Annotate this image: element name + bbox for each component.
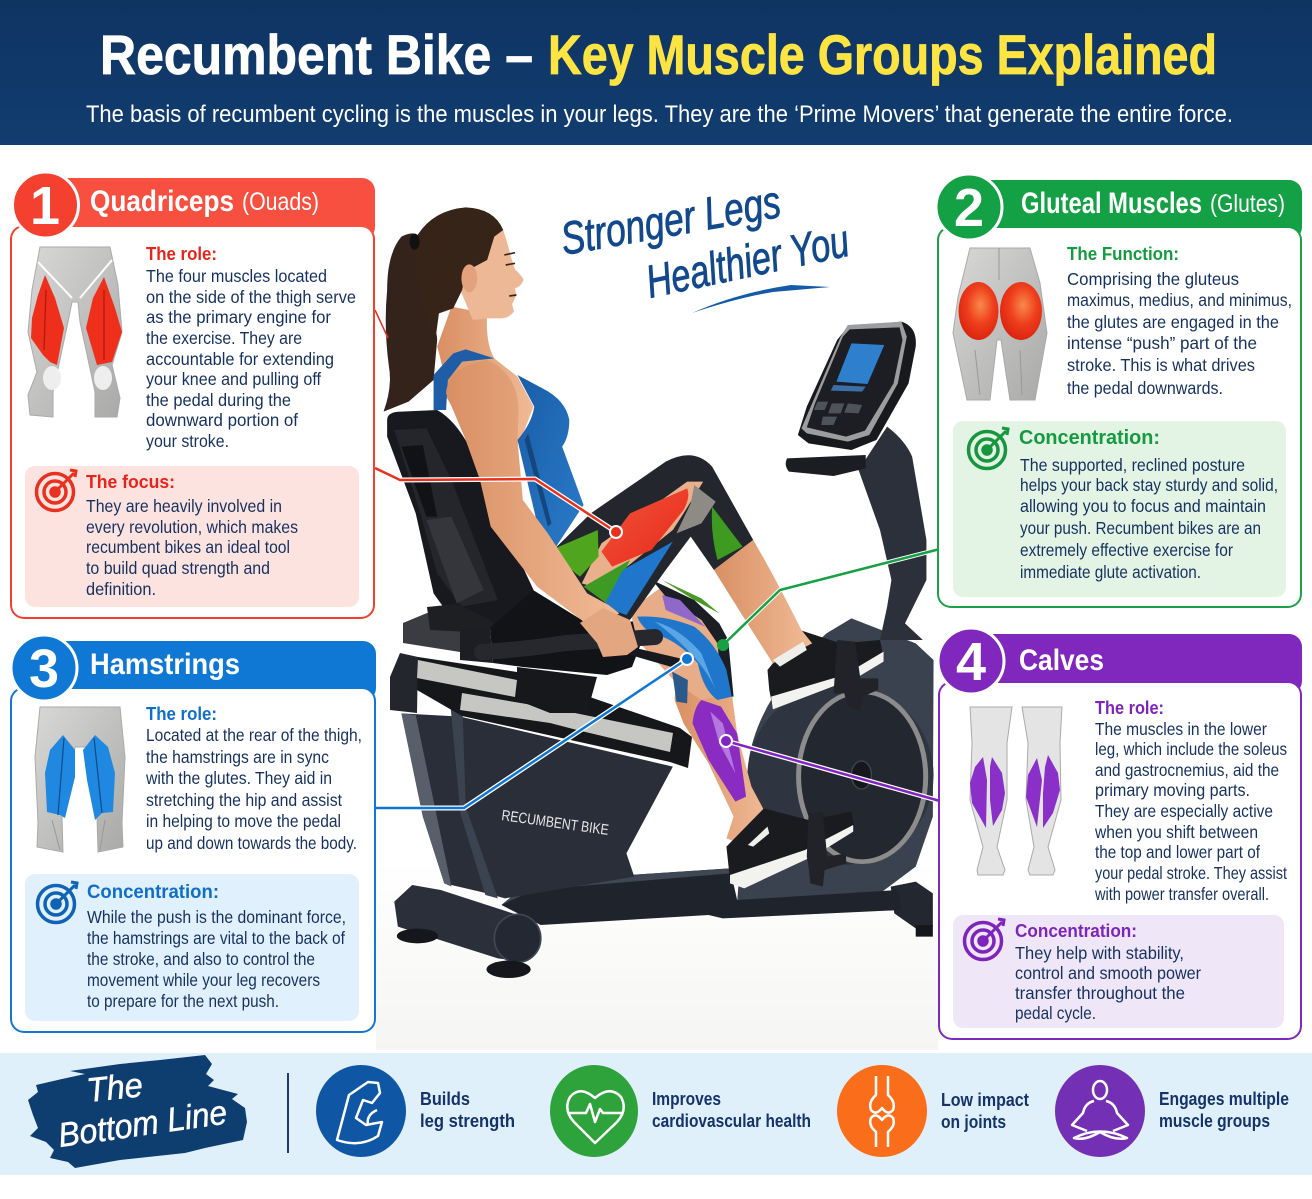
icon: meditating figure <box>1055 1065 1145 1157</box>
eye and lips <box>504 253 516 296</box>
under-thigh bar <box>630 647 680 668</box>
concentration text <box>1015 921 1201 1023</box>
slogan underline <box>692 285 830 313</box>
bike rear flywheel assembly <box>737 618 934 937</box>
icon: heart <box>550 1065 638 1157</box>
connector: calves <box>720 735 940 801</box>
benefit text line two: cardiovascular health <box>652 1111 811 1131</box>
icon: quadriceps anatomy <box>28 247 122 417</box>
handle block <box>460 628 493 663</box>
behind knee block <box>672 672 688 703</box>
bike console post <box>859 427 926 640</box>
panel: calves <box>938 628 1302 1040</box>
number badge 4: 4 <box>956 632 986 692</box>
text: the role: as the primary engine for <box>146 307 331 327</box>
seat back <box>387 410 534 627</box>
calf muscle <box>692 700 746 802</box>
text: the role: your knee and pulling off <box>146 369 321 389</box>
sock <box>748 827 769 847</box>
benefit: muscle groups <box>1055 1065 1289 1157</box>
text: the role <box>145 704 362 853</box>
hair tie <box>410 234 420 250</box>
benefit text line two: on joints <box>941 1112 1006 1132</box>
hair <box>414 207 503 340</box>
text: the role: the hamstrings are in sync <box>146 747 329 767</box>
text: the role: stretching the hip and assist <box>146 790 342 810</box>
panel: hamstrings <box>10 635 376 1033</box>
icon: glutes anatomy <box>953 248 1047 400</box>
ponytail <box>384 233 437 412</box>
text: the role: and gastrocnemius, aid the <box>1095 760 1279 780</box>
icon: calves anatomy <box>970 707 1062 875</box>
focus text: They are heavily involved in <box>86 496 282 516</box>
sock <box>773 642 807 667</box>
text: the role: The muscles in the lower <box>1095 719 1267 739</box>
face <box>453 223 524 320</box>
connector: glutes <box>717 549 940 651</box>
benefit text: Improves <box>652 1089 721 1109</box>
calf skin <box>675 643 769 845</box>
upper pedal strap <box>834 640 878 712</box>
slogan line two: Healthier You <box>641 214 854 308</box>
illustration: seat and rails <box>390 590 692 768</box>
benefit text: Low impact <box>941 1090 1029 1110</box>
benefit: low impact <box>837 1065 1029 1157</box>
text: the role: The role: <box>146 244 217 264</box>
concentration text <box>1019 427 1278 582</box>
icon: target <box>968 428 1008 468</box>
focus text: to build quad strength and <box>86 558 270 578</box>
concentration text: to prepare for the next push. <box>87 991 279 1011</box>
bike main frame <box>394 697 901 978</box>
title: Recumbent Bike – <box>100 23 533 86</box>
brush title <box>28 1055 247 1168</box>
icon: target <box>38 882 77 922</box>
icon: hamstrings anatomy <box>35 707 125 852</box>
number badge 3: 3 <box>29 639 59 699</box>
raised leg <box>555 455 812 667</box>
concentration text <box>87 882 346 1011</box>
glute strip green <box>662 580 719 613</box>
quadriceps muscle <box>601 488 688 567</box>
concentration text: immediate glute activation. <box>1020 562 1201 582</box>
concentration text: Concentration: <box>1015 921 1137 941</box>
number badge 3 <box>11 635 77 701</box>
concentration text: While the push is the dominant force, <box>87 907 346 927</box>
shin <box>714 540 812 663</box>
knee <box>676 485 716 533</box>
text: the role: with power transfer overall. <box>1094 884 1269 904</box>
number badge 2: 2 <box>954 178 984 238</box>
panel heading: Quadriceps <box>90 185 234 218</box>
floor background <box>376 860 938 1050</box>
benefit text line two: muscle groups <box>1159 1111 1270 1131</box>
concentration text: transfer throughout the <box>1015 983 1185 1003</box>
hand gripping handle <box>580 608 638 657</box>
text: the function: stroke. This is what drives <box>1067 355 1255 375</box>
text: the function: the pedal downwards. <box>1067 378 1223 398</box>
text: the role <box>1094 698 1287 904</box>
arm <box>446 360 619 627</box>
concentration text: The supported, reclined posture <box>1020 455 1245 475</box>
text: the role: when you shift between <box>1094 822 1258 842</box>
panel heading: (Glutes) <box>1210 190 1285 218</box>
concentration text: movement while your leg recovers <box>87 970 320 990</box>
concentration text: pedal cycle. <box>1015 1003 1096 1023</box>
hamstring blue <box>603 542 673 615</box>
lower pedal strap <box>807 812 846 887</box>
text: the role: the exercise. They are <box>146 328 302 348</box>
illustration: woman upper body <box>384 207 619 627</box>
upper shoe <box>767 630 884 708</box>
concentration text: control and smooth power <box>1015 963 1201 983</box>
concentration text: extremely effective exercise for <box>1020 540 1233 560</box>
rear rail block <box>390 653 418 713</box>
benefit: leg strength <box>316 1065 515 1157</box>
hamstring muscle <box>637 616 732 700</box>
text: the role: The four muscles located <box>146 266 327 286</box>
text: the function: The Function: <box>1067 244 1179 264</box>
text: the role: the pedal during the <box>146 390 291 410</box>
text: the role: Located at the rear of the thigh, <box>146 725 362 745</box>
slogan line one: Stronger Legs <box>557 175 784 265</box>
number badge 2 <box>936 174 1002 240</box>
panel heading: (Ouads) <box>242 188 319 216</box>
upper shoe sole <box>771 652 884 709</box>
header banner <box>0 0 1312 145</box>
seat cushion <box>490 590 650 675</box>
upper silver rail <box>417 660 517 697</box>
seat mount plate <box>517 667 597 713</box>
callout: concentration <box>953 421 1286 597</box>
benefit text line two: leg strength <box>420 1111 515 1131</box>
neck and shoulder <box>437 307 534 443</box>
lower leg <box>630 580 884 888</box>
text: the role: downward portion of <box>146 410 298 430</box>
text: the role: on the side of the thigh serve <box>146 287 356 307</box>
number badge 1 <box>12 172 78 238</box>
concentration text: the hamstrings are vital to the back of <box>87 928 345 948</box>
shorts <box>555 455 753 620</box>
knee muscle green <box>712 507 742 560</box>
icon: target <box>964 919 1004 960</box>
bike console monitor <box>786 322 916 476</box>
benefit text: Builds <box>420 1089 470 1109</box>
text: the role: accountable for extending <box>146 349 334 369</box>
focus text: The focus: <box>86 472 175 492</box>
illustration: bike rear <box>387 322 934 978</box>
glute muscle <box>555 530 599 577</box>
concentration text: your push. Recumbent bikes are an <box>1020 518 1261 538</box>
connector: quadriceps <box>375 310 622 538</box>
lower shoe sole <box>730 825 853 888</box>
text: the role: The role: <box>146 704 217 724</box>
text: the role: They are especially active <box>1095 801 1273 821</box>
benefit text: Engages multiple <box>1159 1089 1289 1109</box>
thigh skin <box>630 587 732 700</box>
text: the function: intense “push” part of the <box>1067 333 1257 353</box>
connector: hamstrings <box>376 653 693 808</box>
illustration: legs <box>555 455 884 888</box>
icon: target <box>36 470 76 510</box>
shorts edge with green <box>652 580 734 697</box>
panel: glutes <box>936 174 1302 608</box>
ear <box>461 264 477 292</box>
text: the role: your stroke. <box>146 431 229 451</box>
brush title: Bottom Line <box>56 1094 229 1155</box>
text: the role: The role: <box>1095 698 1164 718</box>
hamstring highlight <box>655 622 716 690</box>
focus text <box>86 472 298 599</box>
callout: the focus <box>25 466 359 607</box>
divider <box>287 1073 289 1153</box>
focus text: definition. <box>86 579 156 599</box>
icon: knee joint <box>837 1065 927 1157</box>
slogan <box>557 175 854 313</box>
lower silver rail <box>460 693 673 752</box>
calf highlight <box>710 712 735 773</box>
text: the role: leg, which include the soleus <box>1095 739 1287 759</box>
concentration text: allowing you to focus and maintain <box>1020 496 1266 516</box>
rear handle tube <box>403 613 490 652</box>
focus text: recumbent bikes an ideal tool <box>86 537 290 557</box>
hamstring green <box>584 560 630 605</box>
concentration text: Concentration: <box>1019 427 1160 449</box>
concentration text: the stroke, and also to control the <box>87 949 315 969</box>
concentration text: Concentration: <box>87 882 219 903</box>
panel heading: Hamstrings <box>90 648 240 681</box>
text: the role: with the glutes. They aid in <box>145 768 332 788</box>
footer band: the bottom line <box>0 1053 1312 1175</box>
tank top <box>434 349 584 548</box>
text: the function: maximus, medius, and minimus, <box>1067 290 1292 310</box>
panel heading: Gluteal Muscles <box>1021 187 1202 220</box>
text: the role: primary moving parts. <box>1095 780 1250 800</box>
text: the function <box>1067 244 1292 398</box>
rail backing <box>417 657 692 768</box>
number badge 4 <box>938 628 1004 694</box>
text: the role: in helping to move the pedal <box>146 811 341 831</box>
brush title: The <box>85 1066 145 1110</box>
subtitle: The basis of recumbent cycling is the muscles in your legs. They are the ‘Prime Movers’ that generate the entire force. <box>86 101 1233 128</box>
text: the role: the top and lower part of <box>1095 842 1260 862</box>
panel heading: Calves <box>1019 644 1104 677</box>
bike label: RECUMBENT BIKE <box>500 807 610 839</box>
icon: flexed arm <box>316 1065 406 1157</box>
panel: quadriceps <box>10 172 375 619</box>
lower shoe <box>726 808 854 888</box>
concentration text: They help with stability, <box>1015 943 1184 963</box>
number badge 1: 1 <box>30 176 60 236</box>
focus text: every revolution, which makes <box>86 517 298 537</box>
concentration text: helps your back stay sturdy and solid, <box>1020 475 1278 495</box>
seat block <box>427 604 500 632</box>
callout: concentration <box>25 874 359 1021</box>
text: the role <box>146 244 356 451</box>
text: the role: up and down towards the body. <box>146 833 357 853</box>
benefit: cardiovascular <box>550 1065 811 1157</box>
thigh skin <box>582 482 703 585</box>
illustration: handlebar <box>482 637 655 652</box>
glute overlay purple <box>662 595 705 627</box>
text: the function: Comprising the gluteus <box>1067 269 1239 289</box>
callout: concentration <box>953 915 1284 1028</box>
text: the function: the glutes are engaged in the <box>1067 312 1279 332</box>
